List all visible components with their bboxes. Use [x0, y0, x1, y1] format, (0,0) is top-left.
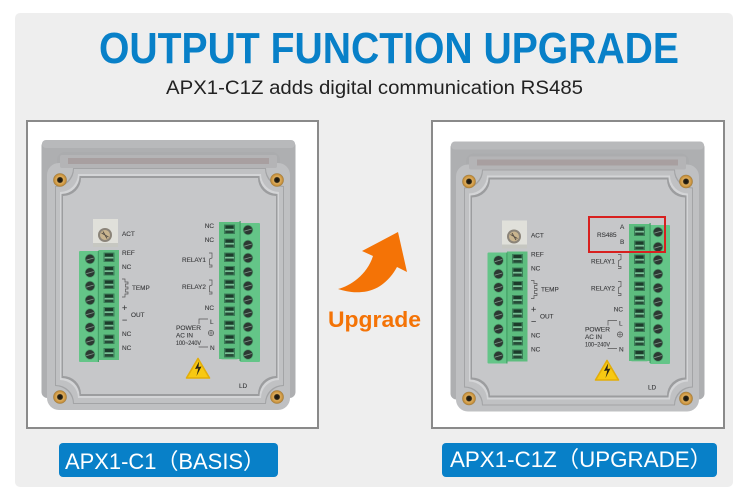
right terminal labels — [176, 223, 248, 390]
right terminal labels: POWER — [585, 326, 610, 334]
left terminal labels: REF — [531, 252, 544, 258]
right terminal labels: NC — [205, 237, 214, 244]
panel: APX1-C1 basis device — [27, 121, 318, 428]
left terminal labels: ACT — [122, 231, 135, 238]
left terminal labels: NC — [531, 346, 541, 354]
RS485 labels: A — [620, 224, 625, 231]
icon: ACT adjustment block — [93, 219, 118, 247]
right terminal labels — [585, 254, 657, 392]
RS485 labels — [597, 224, 625, 246]
right terminal labels: 100~240V — [176, 340, 202, 347]
RS485 labels: B — [620, 239, 624, 246]
right terminal block — [219, 221, 260, 362]
left terminal labels: OUT — [131, 312, 145, 319]
left terminal labels: OUT — [540, 314, 554, 320]
right terminal block — [629, 223, 670, 364]
panel: APX1-C1Z upgraded device — [432, 121, 724, 428]
left terminal block — [488, 252, 528, 364]
title: OUTPUT FUNCTION UPGRADE — [99, 24, 679, 73]
subtitle: APX1-C1Z adds digital communication RS485 — [166, 78, 583, 99]
right terminal labels: RELAY2 — [182, 284, 206, 291]
left terminal labels: + — [531, 304, 536, 314]
icon: ACT adjustment block — [502, 220, 527, 248]
right terminal labels: LD — [239, 383, 248, 390]
left terminal labels — [531, 232, 559, 354]
label: APX1-C1Z upgrade — [442, 443, 717, 477]
left terminal labels: TEMP — [541, 286, 559, 294]
label: APX1-C1 basis: APX1-C1（BASIS） — [65, 449, 265, 474]
right terminal labels: AC IN — [176, 332, 193, 340]
right terminal labels: N — [619, 346, 624, 354]
RS485 highlight box — [589, 217, 665, 252]
right terminal labels: NC — [205, 223, 214, 230]
left terminal labels: − — [531, 316, 536, 326]
right terminal labels: NC — [614, 306, 623, 314]
right terminal labels: RELAY2 — [591, 286, 615, 292]
right terminal labels: 100~240V — [585, 342, 611, 348]
right terminal labels: NC — [205, 305, 214, 312]
upgrade label: Upgrade — [328, 307, 421, 332]
right terminal labels: N — [210, 345, 215, 352]
arrow: upgrade — [338, 232, 407, 292]
icon: high voltage warning — [596, 360, 618, 380]
left terminal labels: NC — [531, 332, 541, 340]
left terminal labels: NC — [122, 331, 132, 338]
left terminal labels: + — [122, 303, 127, 313]
icon: high voltage warning — [186, 358, 210, 378]
right terminal labels: AC IN — [585, 334, 602, 341]
left terminal labels: NC — [531, 266, 541, 272]
left terminal labels: TEMP — [132, 285, 150, 292]
right terminal labels: RELAY1 — [182, 257, 206, 264]
left terminal labels: − — [122, 315, 127, 325]
left terminal block — [79, 250, 119, 362]
right terminal labels: L — [619, 320, 623, 328]
label: APX1-C1 basis — [59, 443, 278, 477]
label: APX1-C1Z upgrade: APX1-C1Z（UPGRADE） — [450, 447, 712, 472]
right terminal labels: POWER — [176, 325, 201, 332]
left terminal labels — [122, 231, 150, 352]
left terminal labels: ACT — [531, 232, 544, 240]
left terminal labels: NC — [122, 264, 132, 271]
left terminal labels: REF — [122, 250, 135, 257]
left terminal labels: NC — [122, 345, 132, 352]
right terminal labels: LD — [648, 384, 657, 392]
right terminal labels: RELAY1 — [591, 258, 615, 266]
RS485 labels: RS485 — [597, 232, 617, 239]
right terminal labels: L — [210, 319, 214, 326]
